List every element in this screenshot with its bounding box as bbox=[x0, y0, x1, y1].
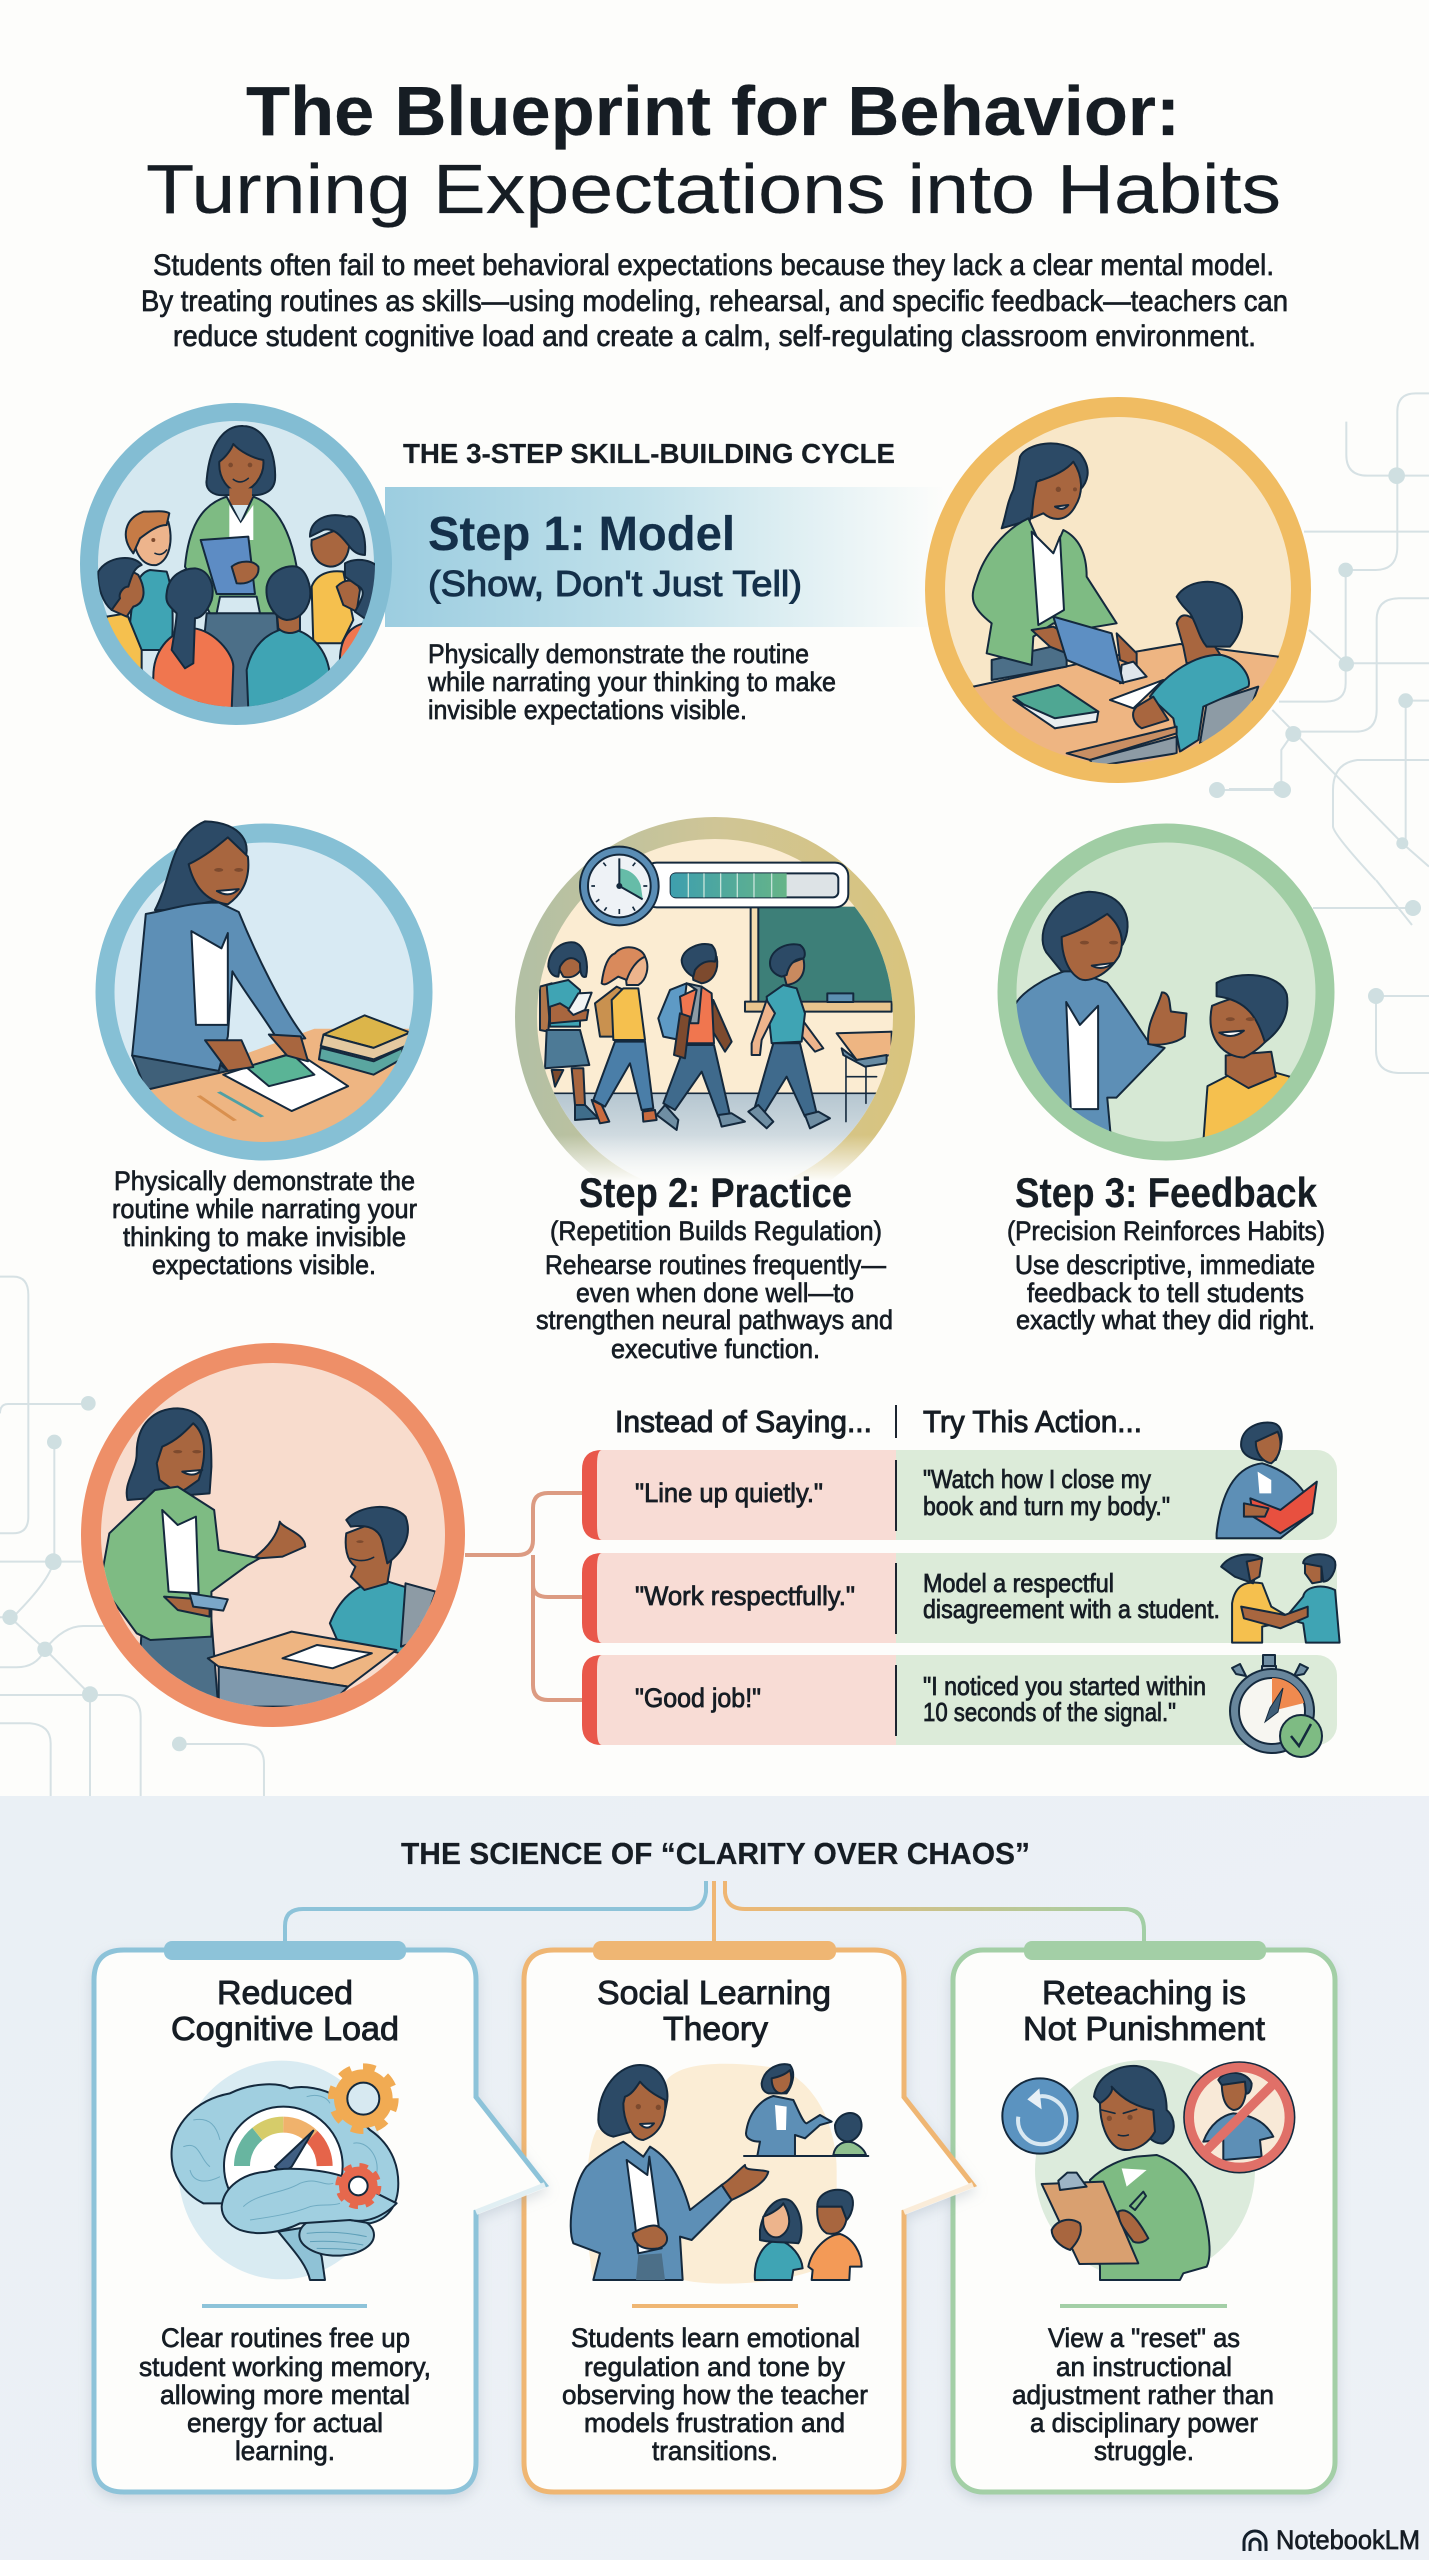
left caption text block: expectations visible. bbox=[152, 1250, 376, 1280]
card: social learning theory: Students learn emotional bbox=[571, 2323, 860, 2353]
illustration: teacher demonstrating at desk bbox=[91, 821, 437, 1163]
icon: orange gear bbox=[333, 2068, 394, 2129]
icon: handshake between two people bbox=[1221, 1554, 1340, 1643]
front student teal shirt bbox=[247, 628, 330, 710]
card: reduced cognitive load: Reduced bbox=[217, 1974, 353, 2011]
background circuit lines: right lower bbox=[1209, 782, 1429, 1073]
card: social learning theory: observing how the teacher bbox=[562, 2380, 868, 2410]
intro paragraph bbox=[141, 249, 1288, 353]
illustration: teacher giving thumbs up bbox=[1007, 833, 1325, 1151]
icon: red gear bbox=[339, 2167, 378, 2205]
row 2 bbox=[582, 1553, 1337, 1643]
card: reteaching is not punishment: Not Punishment bbox=[1023, 2010, 1265, 2047]
NotebookLM logo: NotebookLM bbox=[1276, 2525, 1420, 2555]
right girl with ponytail bbox=[312, 571, 353, 643]
comparison table bbox=[582, 1404, 1340, 1757]
row 1: "Watch how I close my bbox=[923, 1464, 1151, 1494]
illustration: teacher modelling with students bbox=[571, 2064, 868, 2284]
small teacher bbox=[746, 2096, 832, 2156]
card: reduced cognitive load: Cognitive Load bbox=[171, 2010, 399, 2047]
card: reteaching is not punishment bbox=[953, 1941, 1335, 2492]
card: social learning theory: Theory bbox=[663, 2010, 768, 2047]
left caption text block: routine while narrating your bbox=[112, 1194, 417, 1224]
card: social learning theory: regulation and tone by bbox=[584, 2352, 845, 2382]
card: reteaching is not punishment: View a "reset" as bbox=[1048, 2323, 1240, 2353]
section heading: clarity over chaos: THE SCIENCE OF “CLARITY OVER CHAOS” bbox=[401, 1836, 1030, 1871]
connectors from heading to cards bbox=[285, 1881, 1144, 1941]
title: Turning Expectations into Habits bbox=[146, 150, 1281, 228]
intro paragraph: reduce student cognitive load and create a calm, self-regulating classroom environment. bbox=[173, 320, 1256, 353]
card: reduced cognitive load: Clear routines free up bbox=[161, 2323, 410, 2353]
illustration: teacher gesturing to seated student bbox=[91, 1353, 455, 1717]
step 1 text block: while narrating your thinking to make bbox=[427, 667, 836, 697]
step 2 text block: even when done well—to bbox=[576, 1278, 854, 1308]
step 2 text block: strengthen neural pathways and bbox=[536, 1305, 893, 1335]
column headers: Try This Action... bbox=[923, 1404, 1142, 1439]
card: social learning theory: models frustration and bbox=[584, 2408, 845, 2438]
row 1: book and turn my body." bbox=[923, 1491, 1170, 1521]
card: reduced cognitive load bbox=[94, 1941, 545, 2492]
boy with orange hair bbox=[130, 570, 173, 650]
card: social learning theory: Social Learning bbox=[597, 1974, 831, 2011]
row 3: "I noticed you started within bbox=[923, 1671, 1206, 1701]
card: social learning theory bbox=[524, 1941, 973, 2492]
column headers: Instead of Saying... bbox=[615, 1404, 872, 1439]
step 1 text block: invisible expectations visible. bbox=[428, 695, 747, 725]
step 3 text block: exactly what they did right. bbox=[1016, 1305, 1315, 1335]
step 2 text block bbox=[536, 1169, 893, 1364]
step 3 text block bbox=[1007, 1169, 1325, 1335]
step 2 text block: Rehearse routines frequently— bbox=[545, 1250, 886, 1280]
row 3 bbox=[582, 1655, 1337, 1745]
intro paragraph: Students often fail to meet behavioral expectations because they lack a clear mental model. bbox=[153, 249, 1274, 282]
front right girl bbox=[338, 622, 363, 660]
connector from circle to comparison rows bbox=[465, 1493, 582, 1700]
student 4 bbox=[748, 944, 830, 1128]
icon: teacher with red book bbox=[1217, 1423, 1317, 1538]
left caption text block: thinking to make invisible bbox=[123, 1222, 406, 1252]
desk in classroom bbox=[837, 1032, 892, 1060]
step 1 text block bbox=[427, 508, 836, 725]
step 3 text block: Step 3: Feedback bbox=[1015, 1169, 1318, 1216]
step 1 text block: Physically demonstrate the routine bbox=[428, 639, 809, 669]
row 2: "Work respectfully." bbox=[635, 1581, 855, 1611]
step 3 text block: Use descriptive, immediate bbox=[1015, 1250, 1315, 1280]
card: reteaching is not punishment: adjustment rather than bbox=[1012, 2380, 1274, 2410]
illustration: students walking with timer bbox=[515, 817, 915, 1178]
step 2 text block: Step 2: Practice bbox=[579, 1169, 852, 1216]
illustration: brain with gauge and gears bbox=[172, 2061, 398, 2280]
student 2 bbox=[592, 947, 657, 1123]
title bbox=[146, 72, 1281, 228]
step 3 text block: feedback to tell students bbox=[1027, 1278, 1304, 1308]
step 1 text block: Step 1: Model bbox=[428, 508, 735, 561]
student 3 bbox=[657, 944, 745, 1130]
column headers bbox=[615, 1404, 1142, 1439]
clock and progress bar bbox=[580, 847, 848, 925]
card: reduced cognitive load: learning. bbox=[235, 2436, 335, 2466]
step 2 text block: (Repetition Builds Regulation) bbox=[550, 1216, 882, 1246]
section heading: skill-building cycle: THE 3-STEP SKILL-BUILDING CYCLE bbox=[403, 438, 895, 469]
row 3: 10 seconds of the signal." bbox=[923, 1697, 1176, 1727]
illustration: teacher with group of students bbox=[89, 412, 385, 716]
card: reduced cognitive load: student working memory, bbox=[139, 2352, 431, 2382]
illustration: teacher showing tablet to a student bbox=[920, 407, 1313, 783]
illustration: teacher with clipboard and icons bbox=[1002, 2060, 1295, 2280]
card: social learning theory: transitions. bbox=[652, 2436, 778, 2466]
card: reteaching is not punishment: a disciplinary power bbox=[1030, 2408, 1258, 2438]
card: reteaching is not punishment: Reteaching is bbox=[1042, 1974, 1246, 2011]
title: The Blueprint for Behavior: bbox=[246, 72, 1180, 150]
large teacher bbox=[571, 2142, 732, 2280]
student 1 bbox=[540, 942, 598, 1120]
row 2: disagreement with a student. bbox=[923, 1594, 1220, 1624]
row 1: "Line up quietly." bbox=[635, 1478, 823, 1508]
row 2: Model a respectful bbox=[923, 1568, 1114, 1598]
background circuit lines: right bbox=[1229, 393, 1429, 880]
step 2 text block: executive function. bbox=[611, 1334, 820, 1364]
left caption text block bbox=[112, 1166, 417, 1280]
kids bbox=[755, 2240, 803, 2280]
background circuit lines: left bbox=[0, 1277, 264, 1797]
row 1 bbox=[582, 1450, 1337, 1540]
intro paragraph: By treating routines as skills—using modeling, rehearsal, and specific feedback—teachers can bbox=[141, 285, 1288, 318]
step 1 gradient band bbox=[385, 487, 945, 627]
card: reduced cognitive load: allowing more mental bbox=[160, 2380, 410, 2410]
step 3 text block: (Precision Reinforces Habits) bbox=[1007, 1216, 1325, 1246]
card: reteaching is not punishment: an instructional bbox=[1056, 2352, 1232, 2382]
left caption text block: Physically demonstrate the bbox=[114, 1166, 415, 1196]
row 3: "Good job!" bbox=[635, 1683, 761, 1713]
step 1 text block: (Show, Don't Just Tell) bbox=[428, 563, 802, 604]
front left boy bbox=[106, 614, 143, 670]
bottom science panel background bbox=[0, 1796, 1429, 2560]
icon: stopwatch with check bbox=[1230, 1655, 1322, 1757]
card: reduced cognitive load: energy for actual bbox=[187, 2408, 383, 2438]
front student orange shirt bbox=[152, 628, 233, 710]
card: reteaching is not punishment: struggle. bbox=[1094, 2436, 1194, 2466]
bottom fade of ring bbox=[505, 1135, 925, 1181]
